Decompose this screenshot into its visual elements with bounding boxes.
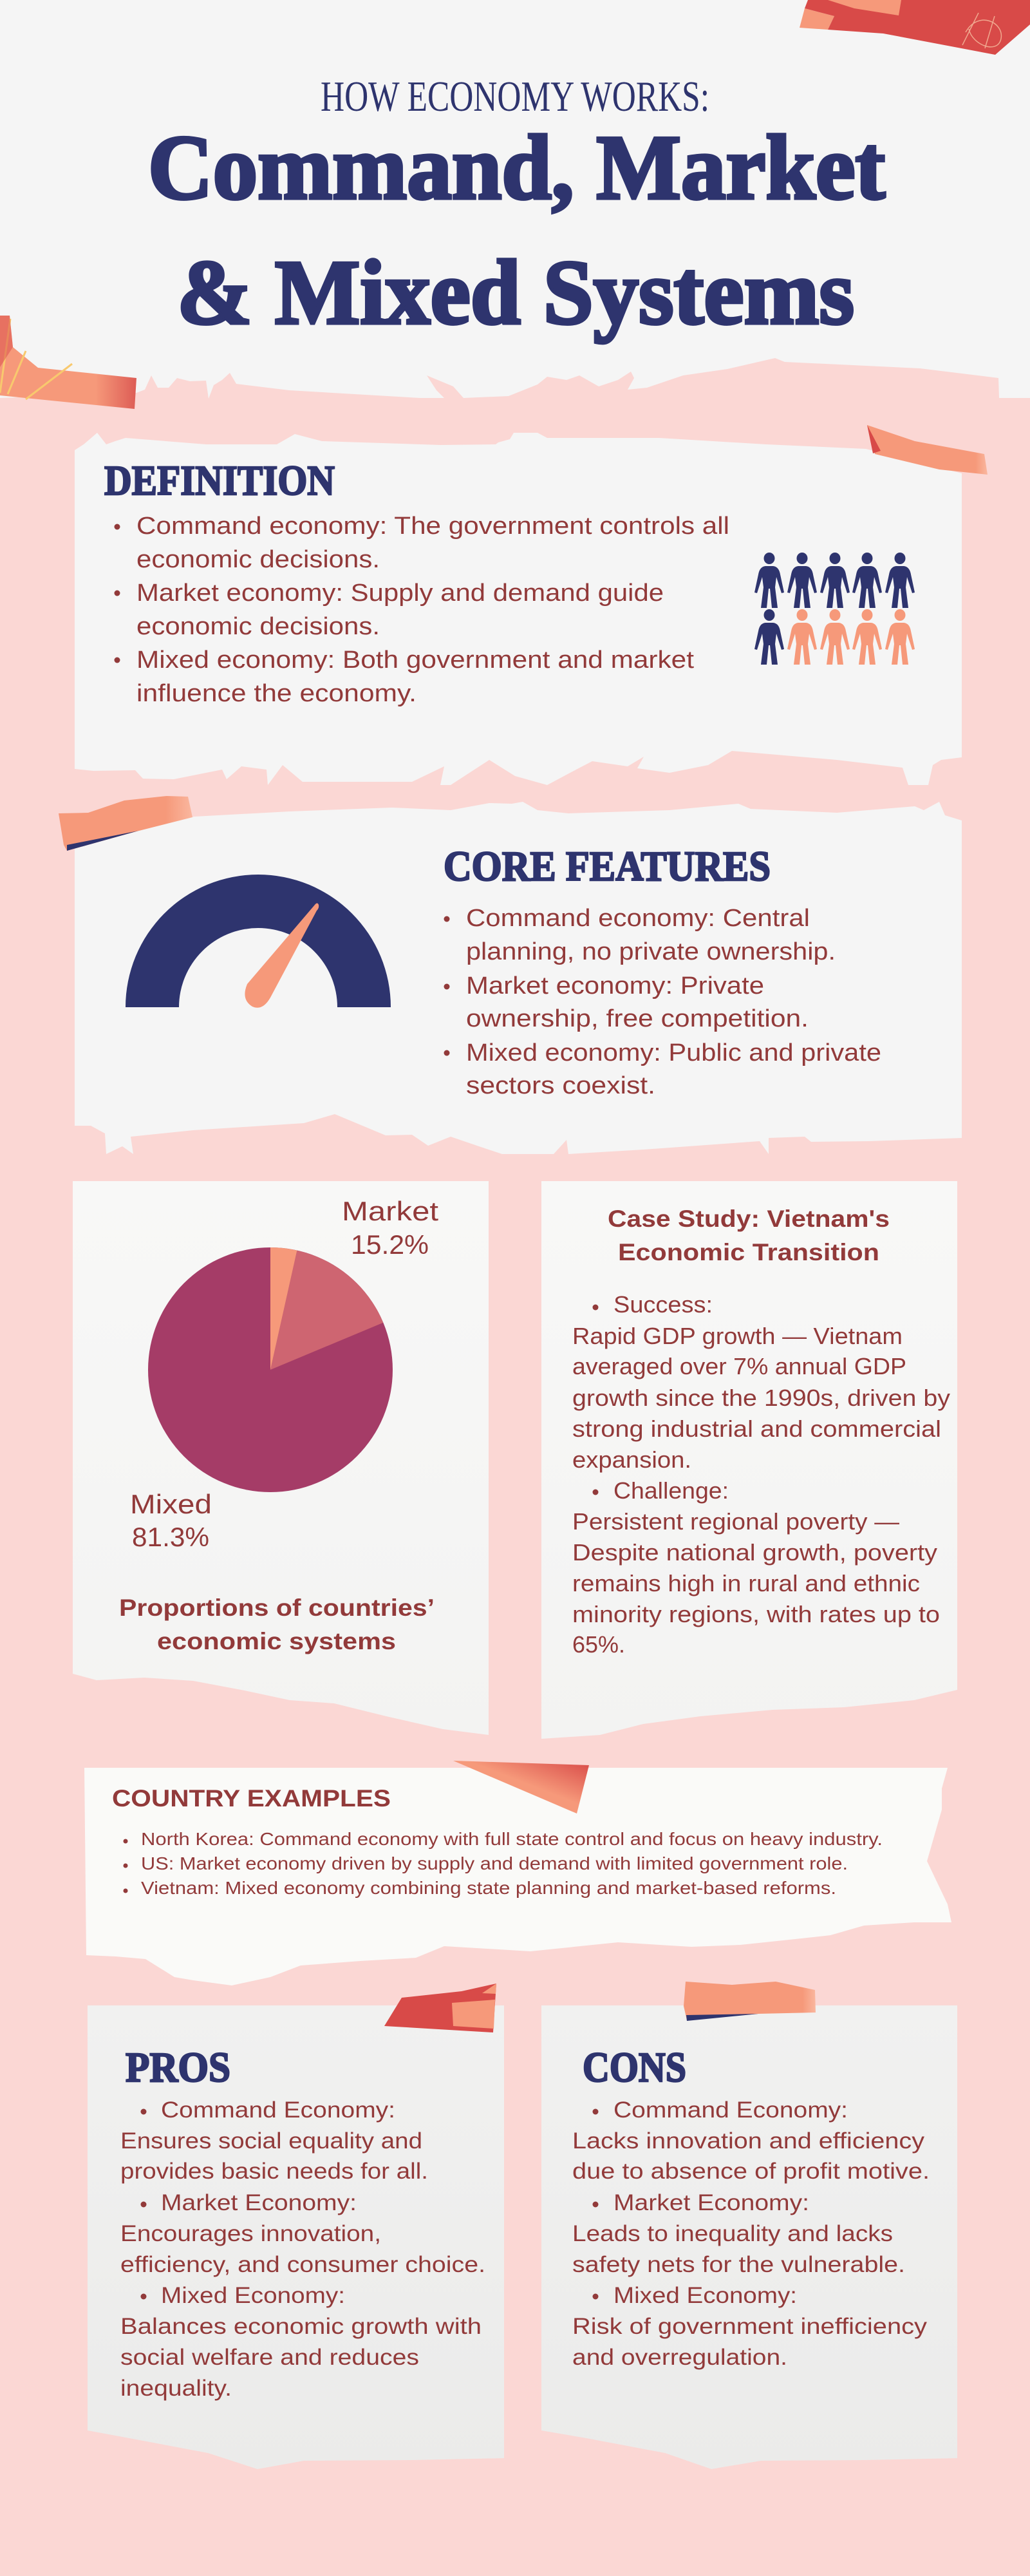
pros list: Mixed Economy: (161, 2283, 345, 2308)
title line 2: & Mixed Systems (177, 242, 854, 343)
country list (124, 1829, 883, 1898)
case study text: expansion. (572, 1446, 691, 1473)
pros list: social welfare and reduces (120, 2345, 419, 2370)
chart caption: Proportions of countries’ (119, 1595, 435, 1621)
pros list: efficiency, and consumer choice. (120, 2252, 485, 2277)
chart caption (119, 1595, 435, 1654)
label: mixed (130, 1489, 212, 1552)
cons list (572, 2098, 930, 2370)
heading: definition: DEFINITION (104, 457, 335, 504)
core features list: Market economy: Private (466, 972, 764, 999)
panel: pros (88, 1984, 504, 2469)
case study text: 65%. (572, 1631, 625, 1658)
core features list: Command economy: Central (466, 905, 810, 932)
tape: pros (384, 1984, 496, 2032)
case study text (572, 1291, 950, 1658)
definition list: Market economy: Supply and demand guide (136, 580, 664, 607)
core features list: sectors coexist. (466, 1072, 655, 1099)
heading: case study (608, 1206, 890, 1265)
cons list: Market Economy: (613, 2190, 809, 2215)
cons list: Lacks innovation and efficiency (572, 2128, 925, 2154)
panel: definition (75, 425, 988, 785)
definition list: influence the economy. (136, 680, 417, 707)
case study text: strong industrial and commercial (572, 1416, 941, 1442)
definition list: economic decisions. (136, 613, 380, 640)
pros list: provides basic needs for all. (120, 2159, 428, 2184)
case study text: growth since the 1990s, driven by (572, 1385, 950, 1411)
tape: top right (800, 0, 1030, 55)
label: mixed: Mixed (130, 1489, 212, 1519)
chart: pie (148, 1247, 393, 1492)
heading: country examples: COUNTRY EXAMPLES (112, 1785, 391, 1812)
label: market: 15.2% (351, 1229, 429, 1260)
cons list: and overregulation. (572, 2345, 787, 2370)
heading: pros: PROS (126, 2044, 230, 2091)
panel: cons (541, 1982, 957, 2469)
case study text: Success: (613, 1291, 713, 1318)
core features list (444, 905, 881, 1099)
label: mixed: 81.3% (132, 1522, 209, 1552)
heading: cons: CONS (583, 2044, 686, 2091)
label: market (342, 1196, 438, 1260)
case study text: averaged over 7% annual GDP (572, 1353, 906, 1379)
cons list: safety nets for the vulnerable. (572, 2252, 905, 2277)
definition list: economic decisions. (136, 546, 380, 573)
pros list: inequality. (120, 2376, 232, 2401)
panel: core features (59, 796, 962, 1154)
subtitle: HOW ECONOMY WORKS: (321, 73, 709, 120)
case study text: Rapid GDP growth — Vietnam (572, 1323, 903, 1349)
tape: country examples (453, 1761, 589, 1814)
definition list: Mixed economy: Both government and market (136, 647, 694, 674)
tape: definition (867, 425, 988, 475)
cons list: Command Economy: (613, 2098, 848, 2123)
pros list: Ensures social equality and (120, 2128, 422, 2154)
cons list: Mixed Economy: (613, 2283, 797, 2308)
case study text: Challenge: (613, 1477, 729, 1504)
panel: pie chart (73, 1181, 489, 1735)
core features list: planning, no private ownership. (466, 938, 836, 965)
core features list: ownership, free competition. (466, 1005, 809, 1032)
panel: case study (541, 1181, 957, 1739)
icon: people (754, 553, 915, 665)
case study text: Persistent regional poverty — (572, 1508, 899, 1535)
icon: gauge (126, 875, 391, 1008)
pros list: Balances economic growth with (120, 2314, 482, 2339)
cons list: due to absence of profit motive. (572, 2159, 930, 2184)
pros list: Encourages innovation, (120, 2221, 381, 2246)
pros list (120, 2098, 485, 2401)
label: market: Market (342, 1196, 438, 1226)
heading: case study: Economic Transition (618, 1239, 879, 1265)
definition list (115, 513, 729, 707)
pros list: Command Economy: (161, 2098, 395, 2123)
title line 1: Command, Market (148, 117, 885, 218)
heading: case study: Case Study: Vietnam's (608, 1206, 890, 1232)
pros list: Market Economy: (161, 2190, 357, 2215)
tape: cons (684, 1982, 816, 2021)
definition list: Command economy: The government controls all (136, 513, 729, 540)
country list: Vietnam: Mixed economy combining state planning and market-based reforms. (141, 1878, 836, 1898)
country list: US: Market economy driven by supply and demand with limited government role. (141, 1853, 848, 1873)
panel: country examples (84, 1761, 951, 1985)
heading: core features: CORE FEATURES (444, 843, 771, 890)
tape: left (0, 316, 136, 409)
cons list: Leads to inequality and lacks (572, 2221, 893, 2246)
chart caption: economic systems (157, 1628, 396, 1654)
cons list: Risk of government inefficiency (572, 2314, 928, 2339)
case study text: Despite national growth, poverty (572, 1539, 937, 1566)
tape: core features (59, 796, 192, 851)
country list: North Korea: Command economy with full state control and focus on heavy industry. (141, 1829, 883, 1849)
header panel (0, 0, 1030, 409)
case study text: remains high in rural and ethnic (572, 1570, 920, 1596)
core features list: Mixed economy: Public and private (466, 1039, 881, 1066)
case study text: minority regions, with rates up to (572, 1601, 940, 1627)
